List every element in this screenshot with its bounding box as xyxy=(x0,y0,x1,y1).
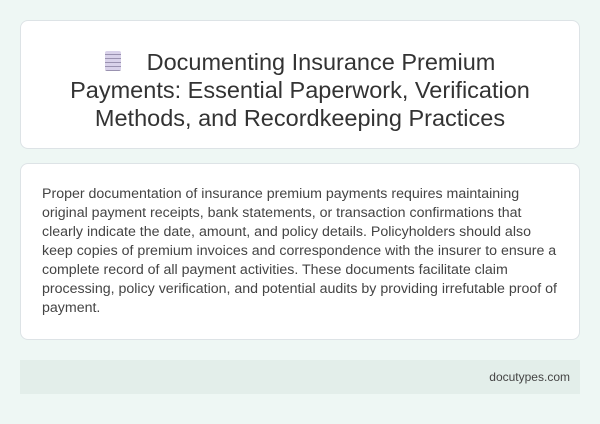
panel: description xyxy=(20,163,580,340)
footer xyxy=(20,360,580,394)
text block: Proper documentation of insurance premium payments requires maintaining original payment receipts, bank statements, or transaction confirmations that clearly indicate the date, amount, and policy details. Policyholders should also keep copies of premium invoices and correspondence with the insurer to ensure a complete record of all payment activities. These documents facilitate claim processing, policy verification, and potential audits by providing irrefutable proof of payment. xyxy=(42,186,557,316)
icon: document xyxy=(105,51,121,71)
title: Documenting Insurance Premium Payments: Essential Paperwork, Verification Methods, and Recordkeeping Practices xyxy=(70,49,530,131)
panel: title xyxy=(20,20,580,149)
footer text: docutypes.com xyxy=(489,370,570,384)
